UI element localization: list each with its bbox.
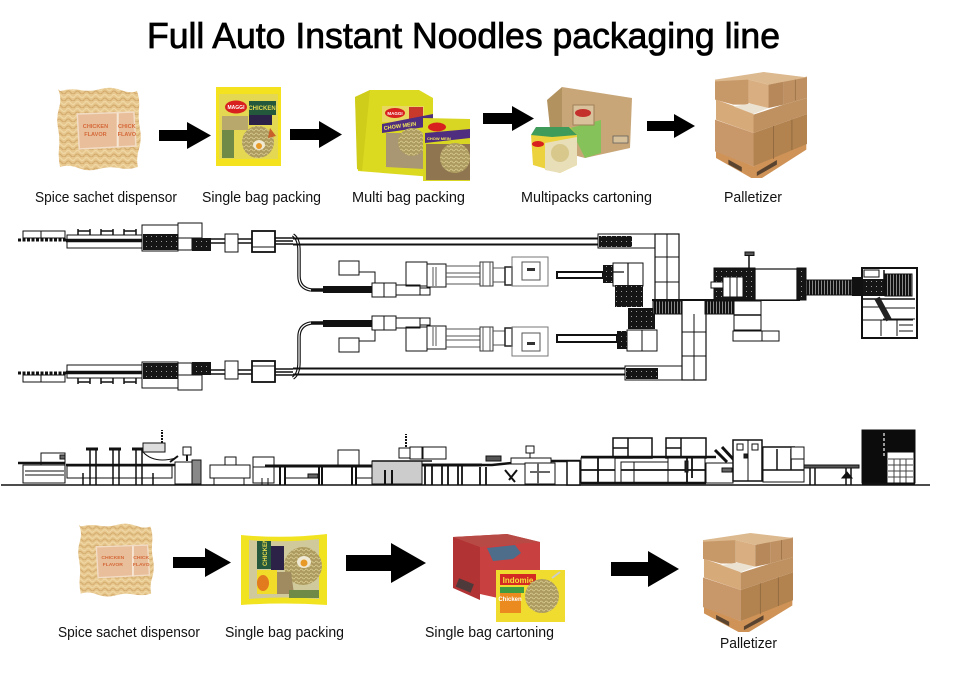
lower outfeed to vertical conveyor: [625, 300, 706, 380]
icon: loaded pallet: [715, 72, 807, 181]
upper long conveyor: [293, 238, 598, 244]
label: palletizer: Palletizer: [720, 636, 777, 652]
icon: loaded pallet: [703, 533, 793, 635]
upper cartoner: [557, 263, 643, 307]
arrow 4: [647, 114, 695, 138]
lower long conveyor: [293, 368, 625, 374]
panel: production line side view: [1, 430, 930, 485]
panel: multipack process flow: [35, 72, 807, 206]
icon: single noodle bag: [241, 534, 327, 605]
icon: single noodle bag: CHICKEN: [263, 539, 269, 566]
label: palletizer: Palletizer: [724, 190, 782, 206]
icon: multi bag pack: MAGGI: [387, 111, 403, 116]
third packing section: [480, 446, 580, 485]
conveyors and tunnels: [210, 450, 375, 485]
icon: red carton with bag: [453, 534, 565, 622]
conveyor to palletizer: [806, 277, 863, 296]
icon: single noodle bag: [216, 87, 281, 166]
icon: single noodle bag: CHICKEN: [248, 106, 276, 112]
label: spice sachet dispensor: Spice sachet dispensor: [58, 625, 200, 641]
chute: [706, 447, 734, 483]
arrow 1: [159, 122, 211, 149]
panel: single bag process flow: [58, 524, 793, 652]
label: multi bag packing: Multi bag packing: [352, 190, 465, 206]
arrow 6: [346, 543, 426, 583]
wrapping machine: [711, 252, 806, 341]
second packing section: [372, 434, 482, 485]
lower branch equipment (mirror): [18, 316, 548, 390]
floor line: [1, 484, 930, 486]
wrapper side view: [763, 447, 859, 485]
label: single bag packing: Single bag packing: [202, 190, 321, 206]
title: Full Auto Instant Noodles packaging line: [147, 15, 780, 56]
upper branch equipment: [18, 223, 548, 297]
icon: red carton with bag: Indomie: [503, 576, 534, 585]
icon: red carton with bag: Chicken: [498, 597, 522, 603]
arrow 7: [611, 551, 679, 587]
icon: single noodle bag: MAGGI: [228, 105, 245, 111]
arrow 5: [173, 548, 231, 577]
palletizer plan: [862, 268, 917, 338]
lower cartoner: [557, 308, 657, 351]
cabinet: [733, 440, 762, 481]
label: spice sachet dispensor: Spice sachet dispensor: [35, 190, 177, 206]
icon: multi bag pack: [355, 90, 470, 181]
arrow 2: [290, 121, 342, 148]
case packers: [581, 438, 716, 483]
label: single bag cartoning: Single bag cartoning: [425, 625, 554, 641]
icon: noodle block with spice sachet: [78, 524, 154, 596]
label: multipacks cartoning: Multipacks cartoning: [521, 190, 652, 206]
panel: production line plan view: [18, 223, 917, 390]
merge conveyors: [652, 300, 800, 314]
icon: multi bag pack: CHOW MEIN: [383, 121, 417, 132]
robot palletizer side view: [862, 430, 915, 484]
label: single bag packing: Single bag packing: [225, 625, 344, 641]
spice dispenser section: [18, 430, 201, 485]
arrow 3: [483, 106, 534, 131]
icon: carton with multipack: [531, 87, 632, 173]
upper outfeed to vertical conveyor: [598, 234, 679, 300]
icon: multi bag pack: CHOW MEIN: [427, 136, 451, 141]
icon: noodle block with spice sachet: [57, 88, 141, 170]
